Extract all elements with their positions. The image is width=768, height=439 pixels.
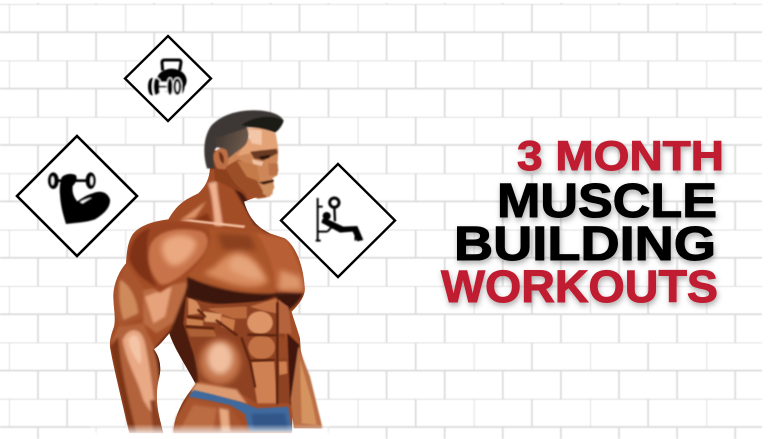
abdominals xyxy=(173,297,323,433)
ear xyxy=(214,148,228,169)
hair quiff xyxy=(241,117,284,133)
side shadow xyxy=(153,287,198,433)
triceps xyxy=(113,263,143,327)
hair xyxy=(204,110,284,169)
pectorals xyxy=(187,228,304,310)
title line: 3 MONTH: 3 MONTH xyxy=(517,132,724,179)
title line: MUSCLE: MUSCLE xyxy=(497,175,717,228)
icon: kettlebell and dumbbell diamond xyxy=(125,36,211,121)
swimwear xyxy=(188,390,292,432)
deltoid xyxy=(127,221,210,293)
traps and neck xyxy=(168,168,270,234)
title line: WORKOUTS: WORKOUTS xyxy=(441,261,718,312)
fade at base of figure xyxy=(90,424,330,439)
bicep xyxy=(143,282,188,333)
hair side fade xyxy=(216,128,248,158)
bodybuilder figure xyxy=(90,110,340,439)
title line: BUILDING: BUILDING xyxy=(454,218,716,271)
icon: bench press diamond xyxy=(281,164,395,277)
torso and arms xyxy=(110,150,322,434)
icon: flexed bicep with dumbbell diamond xyxy=(17,136,137,256)
neck and head xyxy=(204,110,284,199)
forearm xyxy=(110,323,163,433)
hip and belt shadow xyxy=(173,383,247,433)
title xyxy=(441,132,724,312)
